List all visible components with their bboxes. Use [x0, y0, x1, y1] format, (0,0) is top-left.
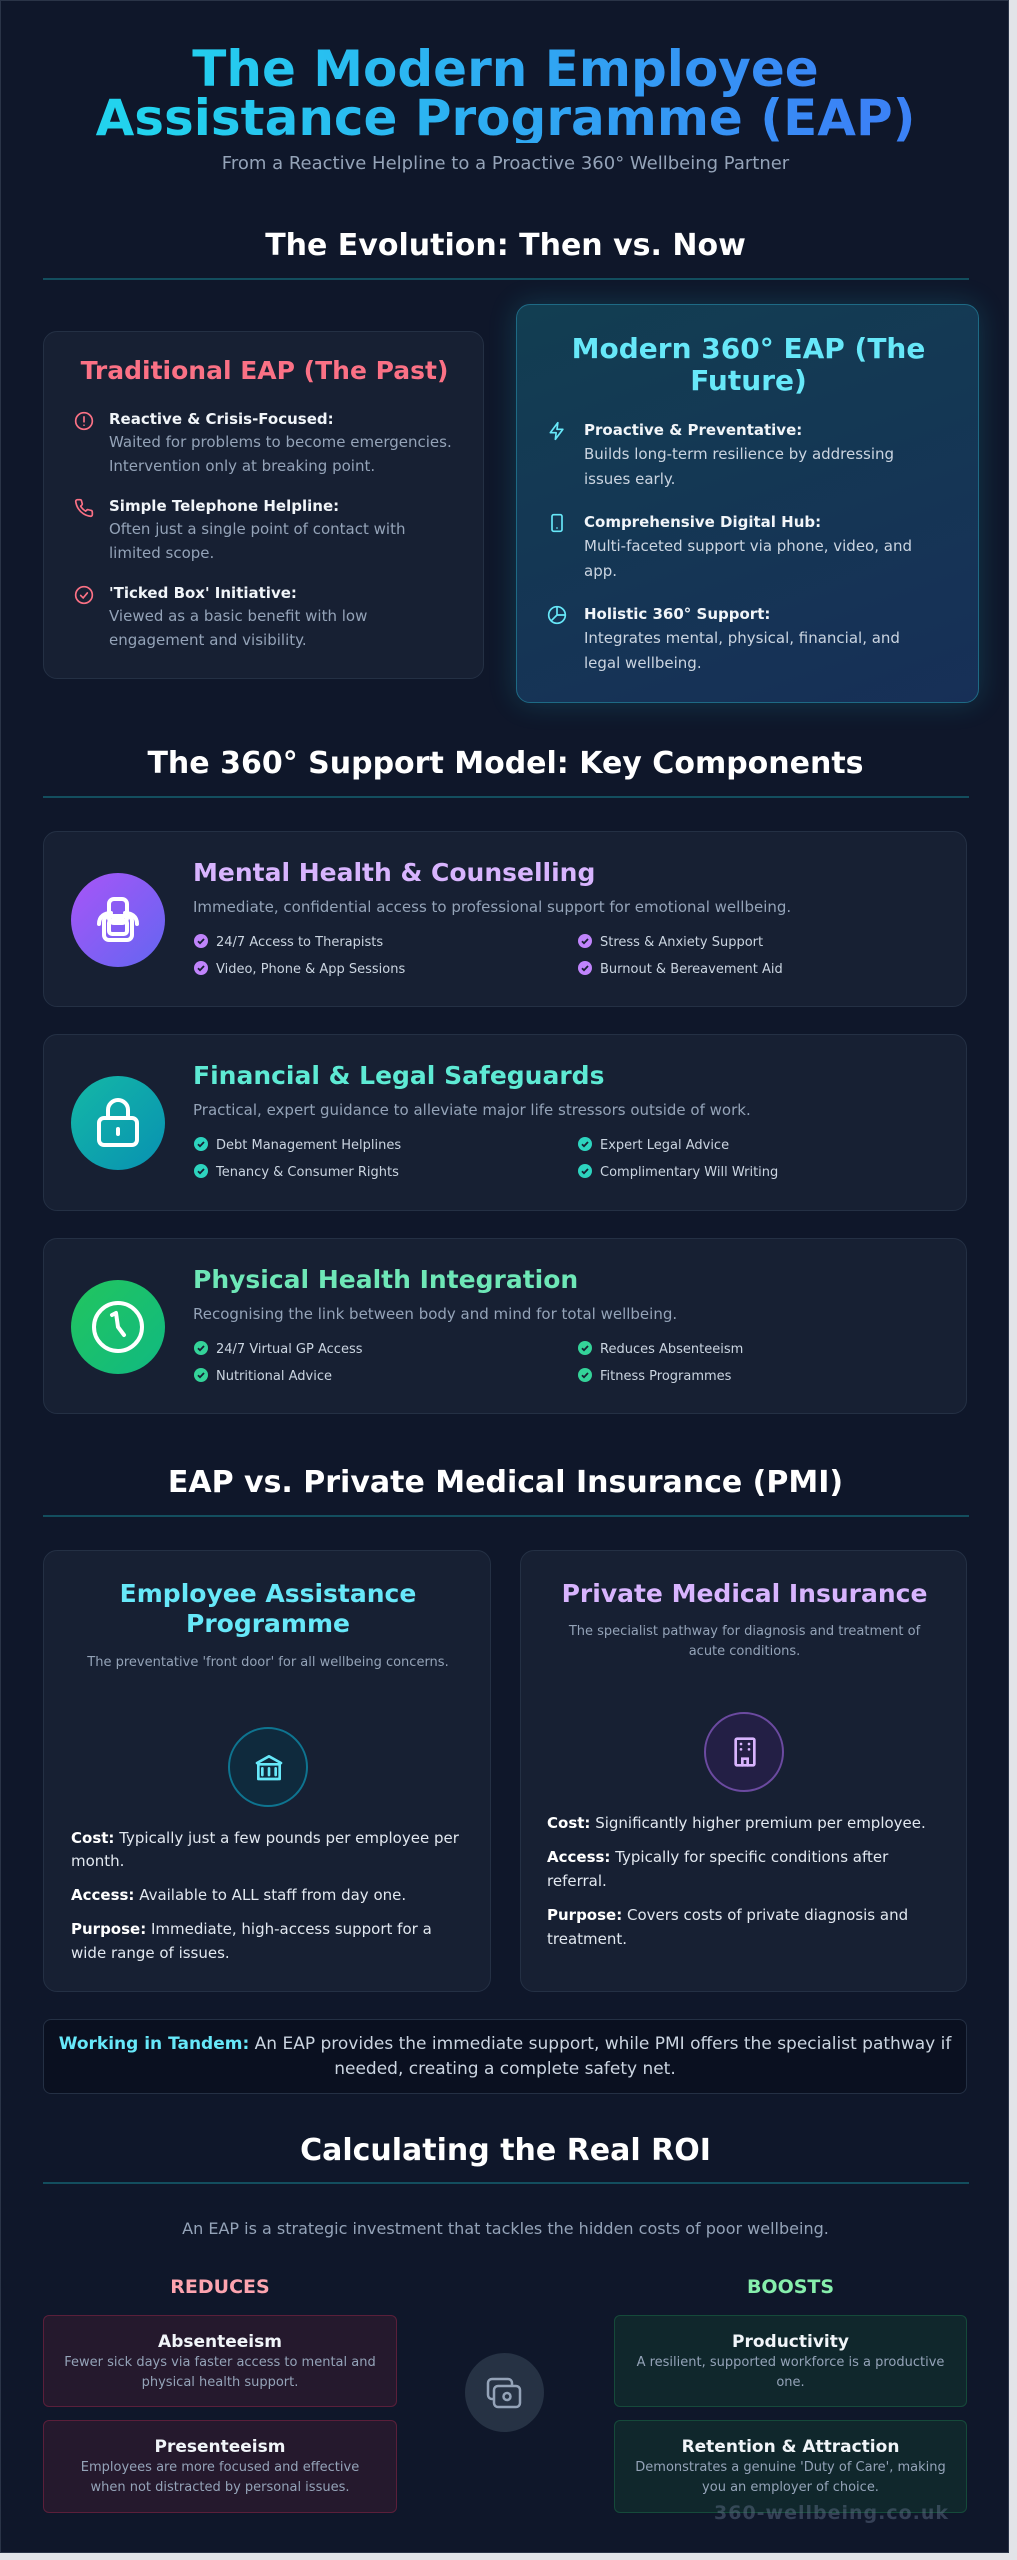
- callout: working in tandem: [43, 2019, 967, 2094]
- icon: hospital building: [704, 1712, 784, 1792]
- heading: EAP: Programme: [186, 1609, 350, 1638]
- box: productivity: [614, 2315, 967, 2407]
- list: mental bullets: Burnout & Bereavement Aid: [600, 962, 783, 977]
- heading: evolution: The Evolution: Then vs. Now: [265, 228, 746, 263]
- item: holistic: legal wellbeing.: [584, 654, 702, 672]
- label: boosts: BOOSTS: [747, 2276, 834, 2298]
- item: proactive: Builds long-term resilience by addressing: [584, 445, 894, 463]
- item: reactive: Intervention only at breaking point.: [109, 456, 375, 474]
- heading: EAP: [120, 1579, 416, 1638]
- text: financial desc: Practical, expert guidance to alleviate major life stressors outside of work.: [193, 1101, 751, 1119]
- box: productivity: Productivity: [732, 2332, 849, 2352]
- item: ticked box: [109, 584, 367, 648]
- panel: EAP comparison: [43, 1550, 491, 1992]
- item: ticked box: engagement and visibility.: [109, 630, 307, 648]
- text: physical desc: Recognising the link between body and mind for total wellbeing.: [193, 1305, 677, 1323]
- item: proactive: [584, 421, 894, 488]
- item: reactive: Waited for problems to become emergencies.: [109, 433, 452, 451]
- heading: EAP vs PMI: EAP vs. Private Medical Insurance (PMI): [168, 1465, 843, 1500]
- list: physical bullets: Reduces Absenteeism: [600, 1342, 743, 1357]
- box: retention: you an employer of choice.: [702, 2480, 879, 2495]
- heading: PMI: Private Medical Insurance: [562, 1579, 927, 1608]
- box: absenteeism: [43, 2315, 397, 2407]
- list: physical bullets: Nutritional Advice: [216, 1369, 332, 1384]
- item: ticked box: 'Ticked Box' Initiative:: [109, 584, 297, 602]
- label: reduces: REDUCES: [170, 2276, 270, 2298]
- text: PMI subtitle: acute conditions.: [689, 1644, 800, 1659]
- title: Assistance Programme (EAP): [96, 89, 915, 147]
- title: [1, 45, 1010, 143]
- subtitle: From a Reactive Helpline to a Proactive 360° Wellbeing Partner: [222, 153, 789, 174]
- item: digital hub: app.: [584, 562, 617, 580]
- item: reactive: Reactive & Crisis-Focused:: [109, 410, 334, 428]
- callout: working in tandem: Working in Tandem: An EAP provides the immediate support, while PMI offers the specialist pathway if: [59, 2034, 951, 2054]
- heading: traditional: Traditional EAP (The Past): [81, 356, 448, 385]
- box: retention: [614, 2420, 967, 2513]
- heading: financial: Financial & Legal Safeguards: [193, 1061, 604, 1090]
- watermark: 360-wellbeing.co.uk: [714, 2502, 949, 2524]
- callout: working in tandem: needed, creating a complete safety net.: [334, 2059, 676, 2079]
- item: proactive: Proactive & Preventative:: [584, 421, 802, 439]
- box: presenteeism: [43, 2420, 397, 2513]
- icon: check circle: [74, 586, 94, 604]
- list: mental bullets: [194, 934, 783, 977]
- heading: mental health: Mental Health & Counselling: [193, 858, 595, 887]
- item: digital hub: Comprehensive Digital Hub:: [584, 513, 821, 531]
- icon: phone: [74, 498, 94, 518]
- list: financial bullets: Tenancy & Consumer Rights: [216, 1165, 399, 1180]
- panel: financial & legal: [43, 1034, 967, 1211]
- box: presenteeism: when not distracted by personal issues.: [90, 2480, 349, 2495]
- text: EAP details: [71, 1829, 459, 1962]
- panel: PMI comparison: [520, 1550, 967, 1992]
- text: ROI subtitle: An EAP is a strategic investment that tackles the hidden costs of poor wellbeing.: [182, 2219, 829, 2238]
- icon: pie: [548, 606, 566, 624]
- text: PMI subtitle: The specialist pathway for diagnosis and treatment of: [569, 1624, 920, 1639]
- box: productivity: one.: [776, 2375, 805, 2390]
- box: presenteeism: Presenteeism: [154, 2437, 285, 2457]
- text: EAP details: Access: Available to ALL staff from day one.: [71, 1886, 406, 1904]
- text: PMI details: Cost: Significantly higher premium per employee.: [547, 1814, 926, 1832]
- box: retention: Demonstrates a genuine 'Duty of Care', making: [635, 2460, 946, 2475]
- item: reactive: [109, 410, 452, 474]
- list: financial bullets: Expert Legal Advice: [600, 1138, 729, 1153]
- heading: physical: Physical Health Integration: [193, 1265, 578, 1294]
- item: telephone: Often just a single point of contact with: [109, 520, 405, 538]
- box: absenteeism: Fewer sick days via faster access to mental and: [64, 2355, 376, 2370]
- item: telephone: [109, 497, 405, 562]
- box: presenteeism: Employees are more focused and effective: [81, 2460, 359, 2475]
- heading: modern: Modern 360° EAP (The: [572, 332, 925, 365]
- text: EAP subtitle: The preventative 'front door' for all wellbeing concerns.: [87, 1655, 449, 1670]
- list: financial bullets: Debt Management Helplines: [216, 1138, 401, 1153]
- box: retention: Retention & Attraction: [682, 2437, 899, 2457]
- heading: support model: The 360° Support Model: Key Components: [147, 746, 864, 781]
- list: physical bullets: 24/7 Virtual GP Access: [216, 1342, 362, 1357]
- icon: lock circle: [71, 1076, 165, 1170]
- title: The Modern Employee: [192, 40, 819, 98]
- icon: bank: [228, 1727, 308, 1807]
- text: EAP details: Cost: Typically just a few pounds per employee per month.: [71, 1829, 459, 1870]
- text: EAP details: wide range of issues.: [71, 1944, 230, 1962]
- text: EAP details: Purpose: Immediate, high-access support for a: [71, 1920, 432, 1938]
- icon: money: [465, 2353, 544, 2432]
- list: physical bullets: Fitness Programmes: [600, 1369, 731, 1384]
- panel: physical health: [43, 1238, 967, 1414]
- box: productivity: A resilient, supported workforce is a productive: [637, 2355, 944, 2370]
- panel: modern EAP: [516, 304, 979, 703]
- item: holistic: [584, 605, 900, 672]
- item: telephone: limited scope.: [109, 544, 214, 562]
- panel: mental health: [43, 831, 967, 1007]
- text: PMI details: [547, 1814, 926, 1948]
- icon: alert: [74, 412, 94, 430]
- item: digital hub: Multi-faceted support via phone, video, and: [584, 537, 912, 555]
- list: mental bullets: Video, Phone & App Sessions: [216, 962, 405, 977]
- text: PMI subtitle: [568, 1624, 920, 1659]
- heading: EAP: Employee Assistance: [120, 1579, 416, 1608]
- text: PMI details: Purpose: Covers costs of private diagnosis and treatment.: [547, 1906, 908, 1948]
- item: ticked box: Viewed as a basic benefit with low: [109, 607, 367, 625]
- list: mental bullets: 24/7 Access to Therapists: [216, 935, 383, 950]
- heading: modern: [572, 332, 925, 397]
- list: mental bullets: Stress & Anxiety Support: [600, 935, 763, 950]
- icon: phone device: [551, 514, 563, 532]
- text: PMI details: Access: Typically for specific conditions after referral.: [547, 1848, 888, 1890]
- list: financial bullets: Complimentary Will Writing: [600, 1165, 778, 1180]
- list: physical bullets: [194, 1341, 743, 1384]
- box: absenteeism: physical health support.: [142, 2375, 298, 2390]
- item: digital hub: [584, 513, 912, 580]
- item: proactive: issues early.: [584, 470, 675, 488]
- box: absenteeism: Absenteeism: [158, 2332, 282, 2352]
- icon: clock circle: [71, 1280, 165, 1374]
- icon: zap: [550, 422, 564, 440]
- icon: mental health circle: [71, 873, 165, 967]
- text: mental desc: Immediate, confidential access to professional support for emotional wellbeing.: [193, 898, 791, 916]
- heading: modern: Future): [690, 364, 807, 397]
- item: telephone: Simple Telephone Helpline:: [109, 497, 339, 515]
- item: holistic: Holistic 360° Support:: [584, 605, 770, 623]
- heading: ROI: Calculating the Real ROI: [300, 2133, 711, 2168]
- panel: traditional EAP: [43, 331, 484, 679]
- item: holistic: Integrates mental, physical, financial, and: [584, 629, 900, 647]
- list: financial bullets: [194, 1137, 778, 1180]
